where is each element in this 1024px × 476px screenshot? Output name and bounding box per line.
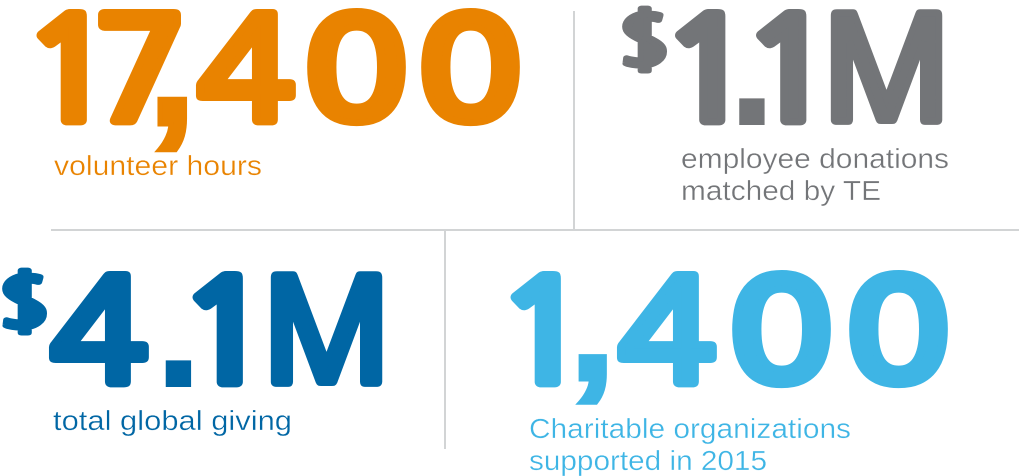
number: 1,400: 1 [493,264,595,406]
number: 17,400: 1 [19,2,121,144]
stat: charitable organizations [493,243,952,476]
label: volunteer hours: volunteer hours [54,150,262,181]
label: charitable organizations supported in 2015: supported in 2015 [529,445,767,476]
number: 1,400: , [570,243,615,411]
number: 17,400 [19,0,524,160]
number: $4.1M: 1 [175,264,277,406]
number: 17,400: 7 [92,2,189,144]
number: $1.1M [616,0,952,158]
number: $1.1M: 1 [658,2,760,144]
number: 1,400: 0 [726,264,836,406]
label: employee donations matched by TE: matched by TE [681,175,881,206]
stat: total global giving [0,242,392,436]
number: 17,400: 0 [416,2,524,144]
number: $4.1M [0,242,392,420]
number: $4.1M: . [156,242,200,420]
number: 1,400: 4 [616,264,718,406]
label: employee donations matched by TE: employee donations [681,143,949,174]
number: 1,400: 0 [844,264,952,406]
label: total global giving: total global giving [53,405,292,436]
number: $4.1M: 4 [48,264,150,406]
number: 1,400 [493,243,952,411]
stat: volunteer hours [19,0,524,181]
label: charitable organizations supported in 2015 [529,413,851,476]
number: $1.1M: $ [616,8,672,77]
stat: employee donations [616,0,952,206]
label: charitable organizations supported in 2015: Charitable organizations [529,413,851,444]
number: $1.1M: M [822,2,952,144]
number: 17,400: 0 [302,2,410,144]
label: employee donations matched by TE [681,143,949,206]
number: $4.1M: M [262,264,392,406]
number: $1.1M: 1 [738,2,840,144]
number: 17,400: 4 [196,2,296,144]
